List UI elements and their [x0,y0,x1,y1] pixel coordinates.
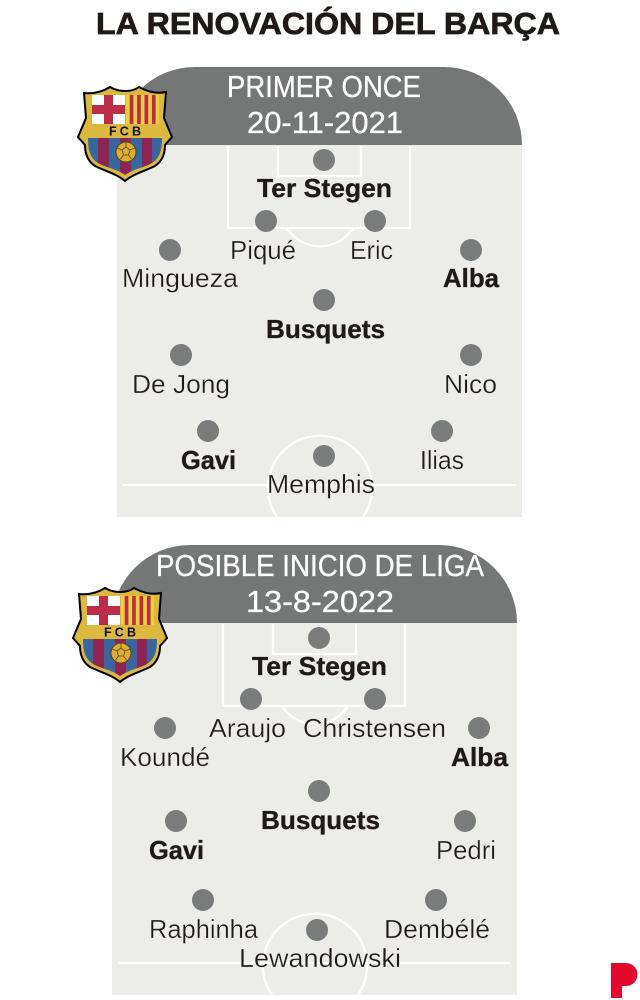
header text: date: 13-8-2022 [246,584,394,619]
player: Dembélé: Dembélé [384,914,490,944]
player: Nico: Nico [444,369,497,399]
player: Gavi [181,420,236,475]
player: De Jong: De Jong [132,369,230,399]
player: Koundé [120,717,210,772]
player: Alba [451,717,509,772]
player: Gavi [149,810,204,865]
player: Raphinha [149,889,259,944]
header [112,545,517,623]
pitch lines [118,624,511,995]
panel: primer once [78,67,522,517]
player: Ter Stegen: Ter Stegen [257,173,392,203]
player: Dembélé [384,889,490,944]
player: Pedri [436,810,496,865]
player: Busquets [261,780,380,835]
player: Piqué [230,210,296,265]
player: Lewandowski [239,919,401,973]
icon: publisher logo P [611,963,638,998]
player: Lewandowski: Lewandowski [239,943,401,973]
player: Christensen [303,688,446,743]
pitch background [117,145,522,517]
player: Busquets: Busquets [261,805,380,835]
header text: date: 20-11-2021 [247,105,403,140]
header text: posible inicio de liga: POSIBLE INICIO DE LIGA [156,548,484,583]
crest: FC Barcelona: FCB [104,626,136,640]
player: Busquets: Busquets [266,314,385,344]
player: Ter Stegen [252,627,387,681]
crest: FC Barcelona [73,588,167,682]
player: Memphis: Memphis [267,469,375,499]
pitch background [112,623,517,995]
player: Memphis [267,445,375,499]
pitch lines [123,146,516,517]
player: Gavi: Gavi [149,835,204,865]
player: Alba: Alba [451,742,509,772]
player: Araujo: Araujo [209,713,286,743]
player: Gavi: Gavi [181,445,236,475]
crest: FC Barcelona [78,87,172,181]
player: Nico [444,344,497,399]
player: Ter Stegen: Ter Stegen [252,651,387,681]
player: Alba: Alba [443,263,500,293]
player: Christensen: Christensen [303,713,446,743]
player: Eric [350,210,393,265]
player: De Jong [132,344,230,399]
header [117,67,522,145]
player: Koundé: Koundé [120,742,210,772]
player: Araujo [209,688,286,743]
header text: primer once: PRIMER ONCE [227,69,421,104]
player: Pedri: Pedri [436,835,496,865]
player: Busquets [266,289,385,344]
panel: posible inicio de liga [73,545,517,995]
player: Alba [443,239,500,293]
player: Ilias: Ilias [420,445,464,475]
player: Ter Stegen [257,149,392,203]
player: Piqué: Piqué [230,235,296,265]
player: Raphinha: Raphinha [149,914,259,944]
title: LA RENOVACIÓN DEL BARÇA [96,5,560,41]
player: Mingueza [122,239,239,293]
player: Eric: Eric [350,235,393,265]
player: Ilias [420,420,464,475]
player: Mingueza: Mingueza [122,263,239,293]
crest: FC Barcelona: FCB [109,124,141,138]
